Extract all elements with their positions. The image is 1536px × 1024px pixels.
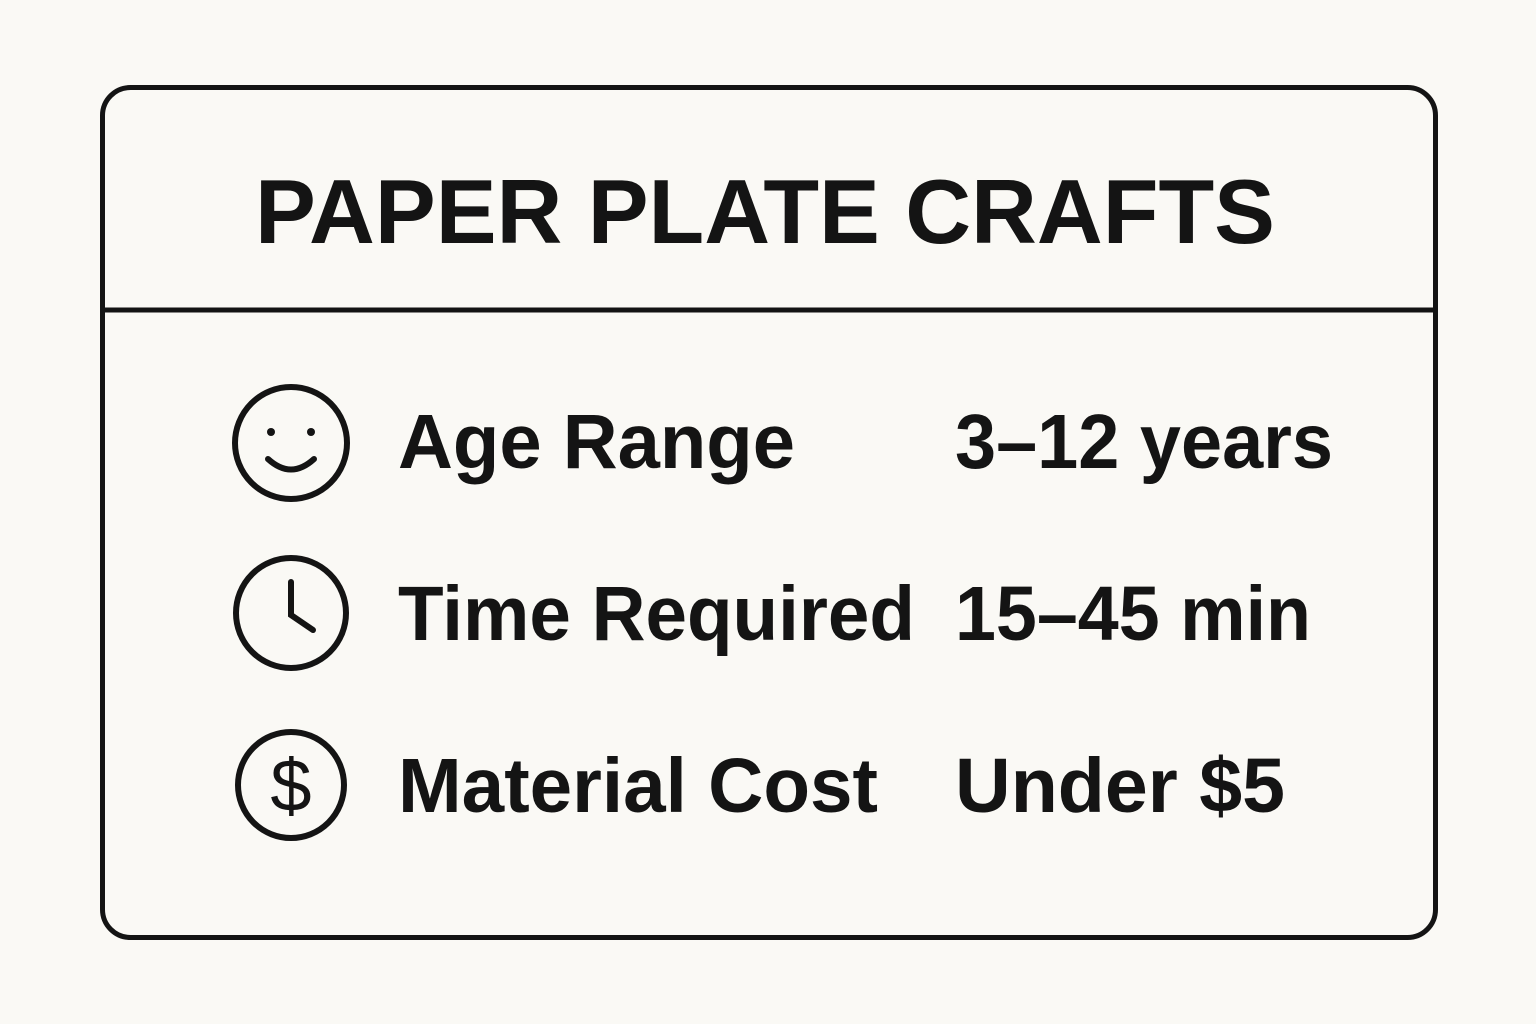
panel: card <box>102 88 1436 938</box>
label: time required: Time Required <box>398 571 915 657</box>
label: age range: Age Range <box>398 399 795 485</box>
title: PAPER PLATE CRAFTS <box>255 162 1275 263</box>
label: material cost: Material Cost <box>398 743 878 829</box>
row: age range <box>235 387 1333 499</box>
icon: dollar: $ <box>270 744 312 827</box>
icon: dollar <box>238 732 344 838</box>
value: time required: 15–45 min <box>955 571 1311 657</box>
value: age range: 3–12 years <box>955 399 1333 485</box>
icon: clock <box>236 558 346 668</box>
value: material cost: Under $5 <box>955 743 1285 829</box>
row: material cost <box>238 732 1285 838</box>
row: time required <box>236 558 1311 668</box>
icon: smiley <box>235 387 347 499</box>
